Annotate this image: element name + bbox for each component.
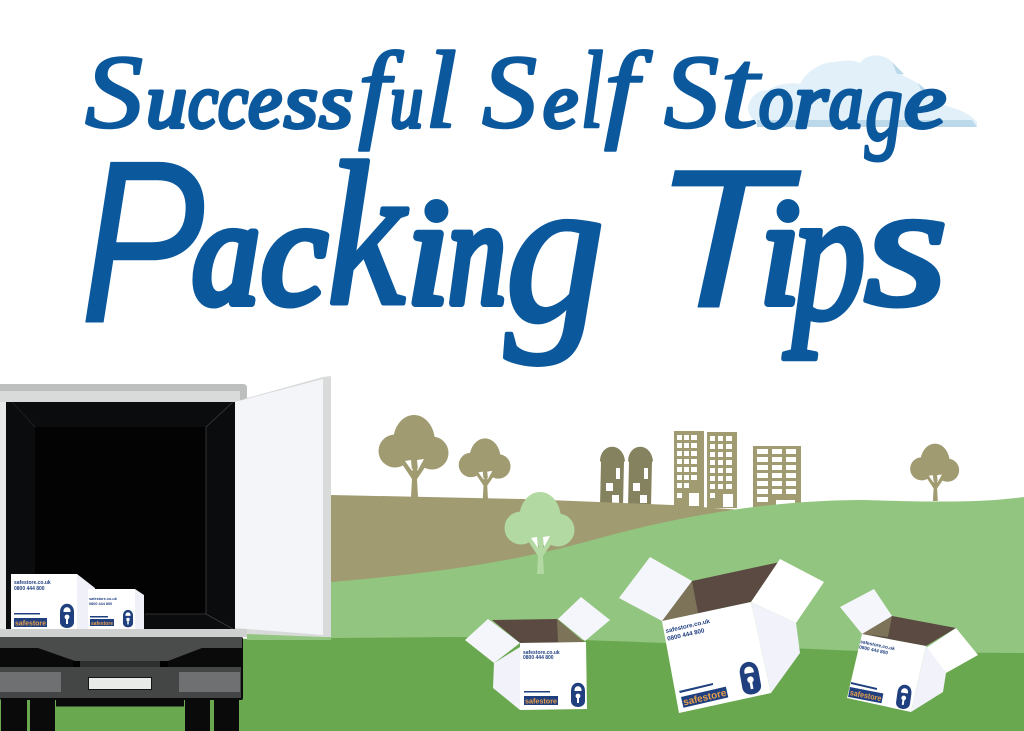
title line: Successful Self Storage: g [865, 51, 903, 162]
truck roof [0, 384, 247, 402]
box on grass: centre: safestore.co.uk [665, 618, 711, 635]
box on truck: small: 0800 444 800 [89, 602, 112, 606]
box on grass: left: safestore [525, 696, 557, 706]
title line: Successful Self Storage: s [284, 58, 318, 144]
title line: Packing Tips: i [760, 168, 800, 336]
truck open door frame [235, 376, 331, 637]
title line: Successful Self Storage: o [759, 58, 793, 144]
title line: Successful Self Storage: S [664, 33, 719, 150]
title line: Packing Tips: p [783, 150, 866, 360]
box on grass: right: 0800 444 800 [858, 644, 889, 657]
truck open door panel [235, 379, 323, 635]
tree: far left [378, 415, 448, 497]
tree: second left [459, 438, 511, 499]
box on truck: large: safestore [15, 618, 46, 628]
box on grass: left [465, 597, 610, 710]
truck left wall edge [0, 402, 6, 629]
box on grass: right: safestore [849, 688, 883, 703]
title line: Successful Self Storage: r [794, 58, 829, 144]
title line: Packing Tips: c [261, 168, 327, 336]
box on grass: centre: safestore [682, 688, 728, 708]
title line: Successful Self Storage: e [904, 58, 946, 144]
title line: Packing Tips: i [407, 168, 449, 336]
truck [0, 376, 331, 731]
title line: Successful Self Storage: S [482, 33, 537, 150]
title line: Packing Tips: k [327, 121, 408, 348]
title line: Successful Self Storage: f [358, 30, 403, 151]
title line: Successful Self Storage: s [319, 58, 353, 144]
box on grass: right: safestore.co.uk [860, 639, 896, 652]
truck floor sill [0, 629, 247, 637]
title line: Successful Self Storage: u [390, 58, 423, 144]
title line: Packing Tips: n [448, 168, 506, 336]
box on truck: small [88, 589, 144, 629]
cloud [748, 55, 977, 127]
truck chassis [0, 637, 243, 706]
hill: light green [331, 497, 1024, 660]
title line: Successful Self Storage: u [146, 58, 187, 144]
box on grass: centre: 0800 444 800 [667, 627, 706, 643]
strip of light green under truck door [247, 631, 331, 640]
truck roof trim [0, 391, 240, 402]
box on truck: small: safestore.co.uk [89, 597, 118, 601]
title line: Successful Self Storage: e [543, 58, 578, 144]
box on grass: right [840, 589, 978, 712]
tower block: middle [707, 432, 737, 508]
box on truck: large: 0800 444 800 [14, 586, 45, 592]
box on grass: centre [619, 557, 824, 713]
title line: Successful Self Storage: S [85, 33, 143, 150]
title line: Packing Tips: s [864, 148, 948, 342]
title line: Successful Self Storage: l [425, 29, 457, 151]
box on truck: large [11, 574, 95, 629]
truck wheels [1, 698, 239, 731]
title line: Successful Self Storage: c [188, 58, 218, 144]
box on truck: large: safestore.co.uk [14, 580, 51, 586]
box on truck: small: safestore [91, 621, 113, 627]
title line: Successful Self Storage: l [580, 29, 604, 151]
title line: Packing Tips: a [192, 168, 260, 336]
hill: brown [331, 495, 770, 600]
box on grass: left: 0800 444 800 [523, 655, 554, 661]
silo buildings [600, 447, 653, 506]
title line: Successful Self Storage: e [248, 58, 282, 144]
title line: Successful Self Storage: a [829, 58, 863, 144]
box on grass: left: safestore.co.uk [523, 650, 560, 656]
ground: dark green [0, 637, 1024, 731]
title line: Packing Tips: P [80, 113, 205, 372]
title line: Packing Tips: g [505, 134, 605, 366]
tree: far right [910, 444, 959, 501]
tower block: left [674, 431, 704, 508]
tower block: right [753, 446, 801, 511]
title line: Successful Self Storage: c [218, 58, 248, 144]
title line: Successful Self Storage: t [719, 25, 763, 152]
truck interior back wall [12, 402, 233, 629]
title line: Successful Self Storage: f [604, 30, 652, 151]
tree: light green foreground [504, 492, 574, 574]
title line: Packing Tips: T [652, 128, 802, 349]
truck interior [6, 402, 235, 629]
